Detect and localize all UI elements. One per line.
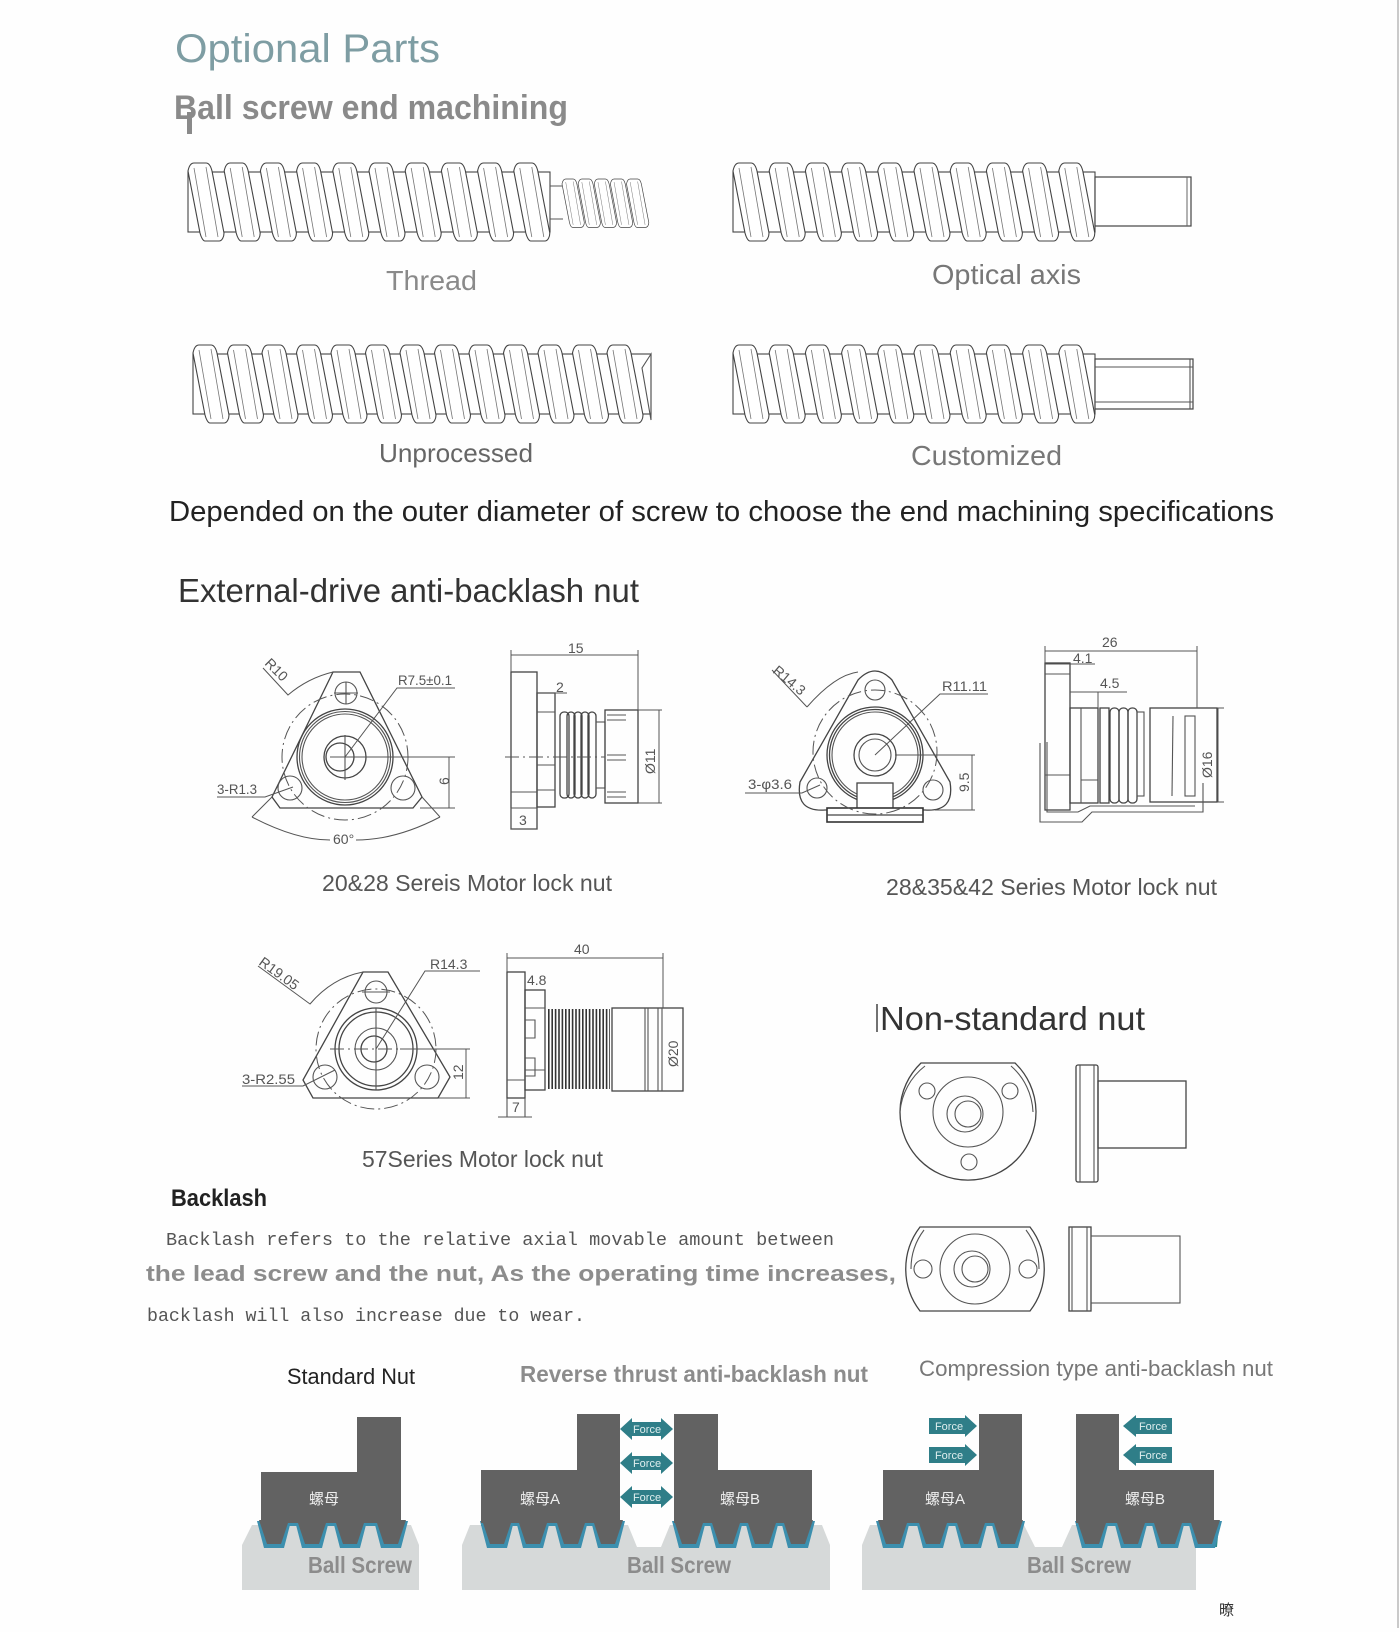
- diagram: standard nut: [242, 1417, 419, 1590]
- diagram: reverse thrust nut: 螺母A: [520, 1491, 560, 1508]
- drawing: 57 nut front view: R14.3: [430, 956, 468, 972]
- drawing: 28&35&42 nut front view: 9.5: [956, 772, 972, 792]
- heading: ball screw end machining: Ball screw end machining: [174, 89, 568, 127]
- drawing: 28&35&42 nut front view: R11.11: [942, 678, 987, 694]
- diagram: compression type nut: Force: [935, 1450, 963, 1462]
- drawing: 28&35&42 nut side view: [1040, 634, 1224, 822]
- caption: 28&35&42 series: 28&35&42 Series Motor lock nut: [886, 874, 1218, 900]
- drawing: 28&35&42 nut side view: 26: [1102, 634, 1118, 650]
- drawing: 28&35&42 nut front view: 3-φ3.6: [748, 776, 792, 792]
- drawing: 28&35&42 nut front view: [745, 662, 988, 822]
- title: Optional Parts: [175, 27, 440, 71]
- diagram: compression type nut: 螺母B: [1125, 1491, 1165, 1508]
- drawing: 57 nut side view: [498, 941, 683, 1117]
- drawing: 57 nut side view: Ø20: [665, 1040, 681, 1067]
- drawing: non-standard nut double-flat side view: [1069, 1227, 1180, 1311]
- drawing: 20&28 nut side view: Ø11: [642, 748, 658, 774]
- diagram: compression type nut: Ball Screw: [1027, 1552, 1131, 1578]
- screw: customized end: [733, 345, 1193, 423]
- drawing: 20&28 nut side view: 3: [519, 812, 527, 828]
- diagram: compression type nut: Force: [935, 1421, 963, 1433]
- text block: backlash: Backlash refers to the relative axial movable amount between: [166, 1230, 834, 1251]
- drawing: 57 nut side view: 40: [574, 941, 590, 957]
- drawing: 57 nut front view: R19.05: [256, 953, 302, 993]
- drawing: non-standard nut double-flat front view: [906, 1227, 1044, 1311]
- label: thread: Thread: [386, 265, 477, 296]
- drawing: 20&28 nut front view: 3-R1.3: [217, 781, 257, 797]
- diagram: reverse thrust nut: Force: [633, 1492, 661, 1504]
- drawing: non-standard nut round side view: [1076, 1065, 1186, 1182]
- drawing: 57 nut front view: 12: [450, 1064, 466, 1080]
- note on end machining: Depended on the outer diameter of screw to choose the end machining specifications: [169, 496, 1274, 528]
- diagram: reverse thrust nut: Force: [633, 1458, 661, 1470]
- drawing: 57 nut side view: 7: [512, 1099, 520, 1115]
- text block: backlash: the lead screw and the nut, As the operating time increases,: [146, 1261, 896, 1286]
- text block: backlash: [146, 1185, 896, 1327]
- text block: backlash: backlash will also increase due to wear.: [147, 1306, 585, 1327]
- drawing: 28&35&42 nut side view: 4.1: [1073, 650, 1093, 666]
- drawing: 57 nut front view: 3-R2.55: [242, 1071, 295, 1087]
- caption: 20&28 series: 20&28 Sereis Motor lock nut: [322, 870, 613, 896]
- drawing: 20&28 nut front view: R10: [262, 655, 292, 684]
- text block: backlash: Backlash: [171, 1185, 267, 1212]
- drawing: 20&28 nut side view: [505, 640, 662, 829]
- drawing: non-standard nut round front view: [900, 1063, 1036, 1180]
- drawing: 20&28 nut front view: 60°: [333, 831, 354, 847]
- heading: standard nut: Standard Nut: [287, 1364, 415, 1389]
- diagram: reverse thrust nut: Force: [633, 1424, 661, 1436]
- drawing: 20&28 nut side view: 2: [556, 679, 564, 695]
- page mark: 暸: [1219, 1602, 1234, 1619]
- label: optical axis: Optical axis: [932, 259, 1081, 290]
- diagram: reverse thrust nut: [462, 1414, 830, 1590]
- heading: non-standard nut: Non-standard nut: [880, 1000, 1145, 1037]
- diagram: reverse thrust nut: Ball Screw: [627, 1552, 731, 1578]
- label: unprocessed: Unprocessed: [379, 438, 533, 468]
- drawing: 57 nut side view: 4.8: [527, 972, 547, 988]
- diagram: compression type nut: 螺母A: [925, 1491, 965, 1508]
- heading: external-drive anti-backlash nut: External-drive anti-backlash nut: [178, 572, 639, 609]
- diagram: standard nut: Ball Screw: [308, 1552, 412, 1578]
- diagram: standard nut: 螺母: [309, 1491, 339, 1508]
- heading: compression type anti-backlash nut: Compression type anti-backlash nut: [919, 1356, 1273, 1381]
- diagram: compression type nut: [862, 1414, 1222, 1590]
- caption: 57 series: 57Series Motor lock nut: [362, 1146, 604, 1172]
- screw: optical axis end: [733, 163, 1191, 241]
- diagram: compression type nut: Force: [1139, 1421, 1167, 1433]
- screw: unprocessed end: [193, 345, 651, 423]
- drawing: 20&28 nut front view: [217, 655, 455, 847]
- drawing: 28&35&42 nut front view: R14.3: [770, 662, 809, 698]
- diagram: compression type nut: Force: [1139, 1450, 1167, 1462]
- label: customized: Customized: [911, 440, 1062, 471]
- drawing: 20&28 nut front view: R7.5±0.1: [398, 672, 452, 688]
- screw: thread end: [188, 163, 649, 241]
- drawing: 20&28 nut front view: 6: [436, 777, 452, 785]
- heading: reverse thrust anti-backlash nut: Reverse thrust anti-backlash nut: [520, 1361, 868, 1387]
- drawing: 20&28 nut side view: 15: [568, 640, 584, 656]
- drawing: 28&35&42 nut side view: 4.5: [1100, 675, 1120, 691]
- diagram: reverse thrust nut: 螺母B: [720, 1491, 760, 1508]
- drawing: 28&35&42 nut side view: Ø16: [1199, 751, 1215, 778]
- drawing: 57 nut front view: [242, 953, 480, 1109]
